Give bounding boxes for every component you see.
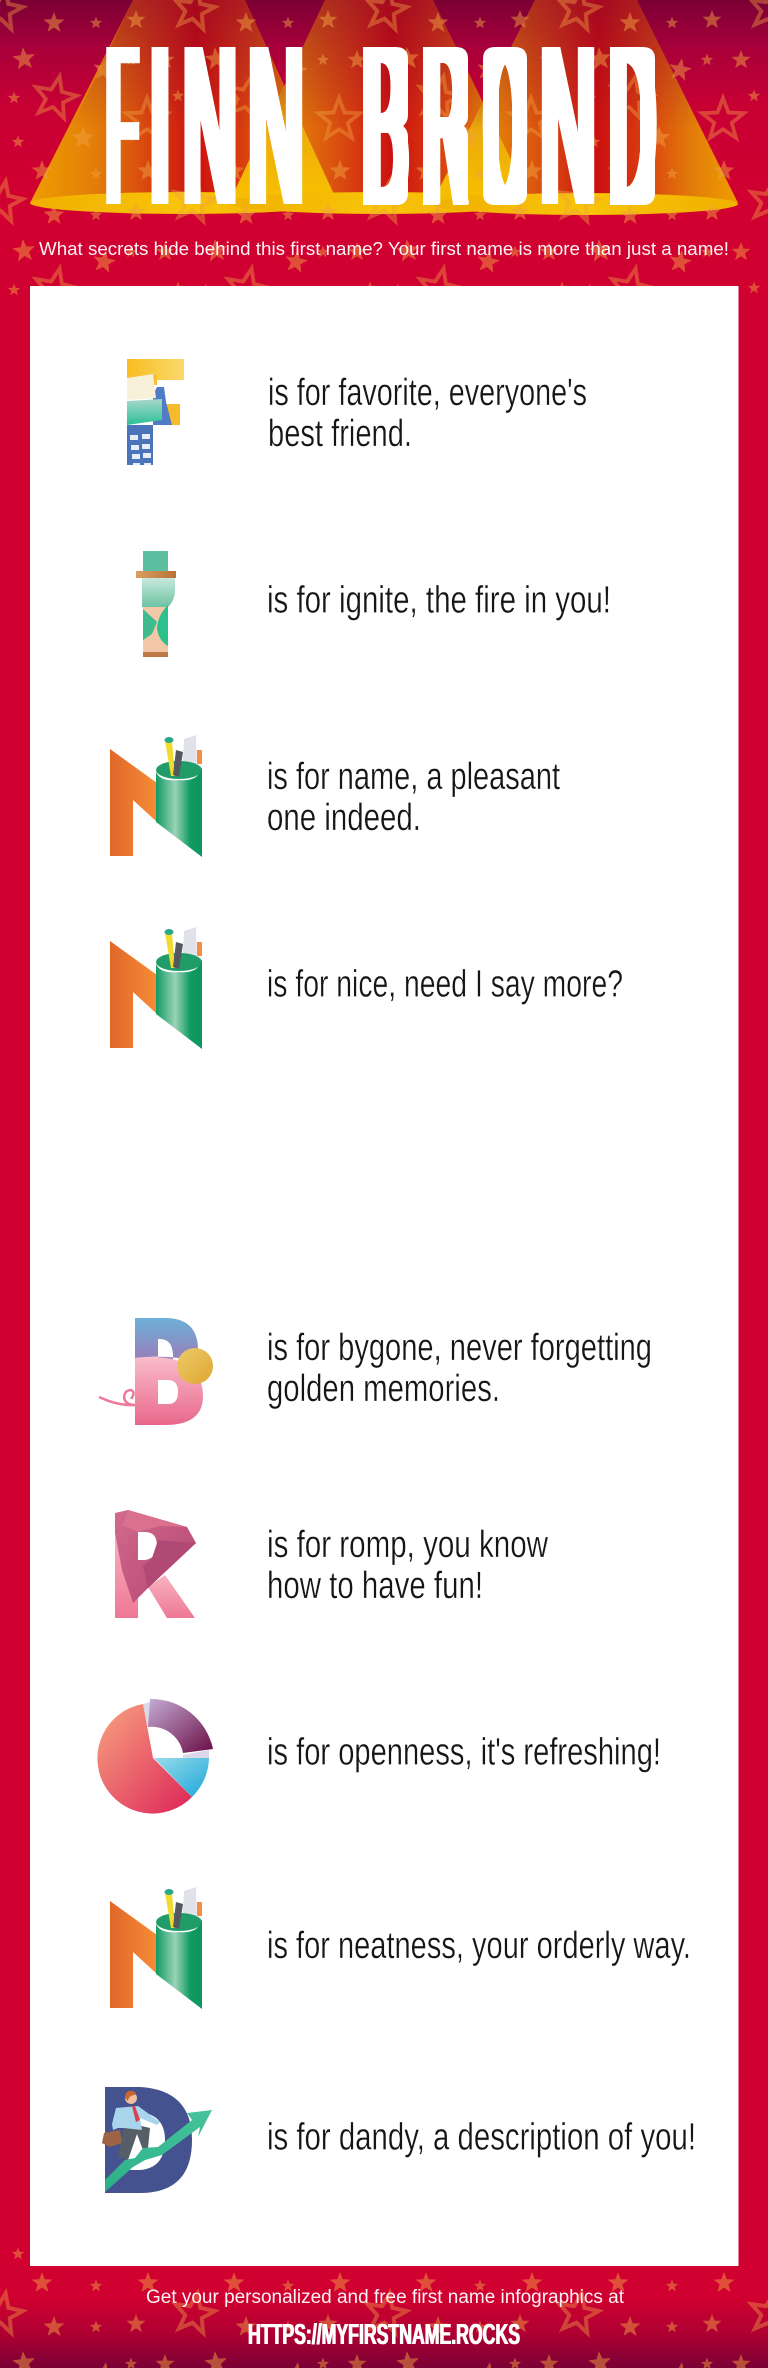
title [106,47,657,204]
icon: letter R gem [115,1510,196,1618]
title: N [541,0,595,253]
row: letter N one [110,735,560,857]
title: N [183,0,236,253]
icon: letter N pencil holder [110,927,202,1049]
title: O [485,0,525,253]
icon: letter B piggy bank [99,1318,213,1425]
icon: letter O pie chart [97,1699,213,1814]
icon: letter I hourglass [136,551,176,657]
row: letter N two [110,927,623,1049]
row: letter N three [110,1887,691,2009]
text: N line: is for nice, need I say more? [267,964,623,1006]
text: R line [267,1524,548,1607]
text: O line: is for openness, it's refreshing! [267,1732,661,1774]
footer url: HTTPS://MYFIRSTNAME.ROCKS [248,2319,520,2351]
title: I [149,0,170,253]
row: letter F [127,359,587,465]
subtitle: What secrets hide behind this first name? Your first name is more than just a name! [39,238,729,259]
title: R [425,0,466,253]
text: F line: best friend. [268,413,412,455]
icon: letter F with office items [127,359,184,465]
title letter bodies [363,47,655,205]
row: letter O [97,1699,661,1814]
icon: letter N pencil holder [110,735,202,857]
footer text: Get your personalized and free first name infographics at [146,2287,625,2308]
text: F line [268,372,587,455]
row: letter D [102,2087,696,2193]
title: D [611,0,654,253]
text: F line: is for favorite, everyone's [268,372,587,414]
title: F [107,0,136,253]
text: B line: golden memories. [267,1368,500,1410]
panel: white letter list [30,286,738,2266]
spotlight cones [30,0,738,215]
text: N line [267,756,560,839]
text: N line: one indeed. [267,797,421,839]
row: letter B [99,1318,652,1425]
text: B line: is for bygone, never forgetting [267,1327,652,1369]
title: N [249,0,303,253]
icon: letter N pencil holder [110,1887,202,2009]
text: R line: is for romp, you know [267,1524,548,1566]
icon: letter D businessman on rising arrow [102,2087,212,2193]
text: N line: is for name, a pleasant [267,756,560,798]
text: R line: how to have fun! [267,1565,483,1607]
title: B [364,0,407,253]
text: B line [267,1327,652,1410]
row: letter R [115,1510,548,1618]
row: letter I [136,551,611,657]
text: I line: is for ignite, the fire in you! [267,580,611,622]
